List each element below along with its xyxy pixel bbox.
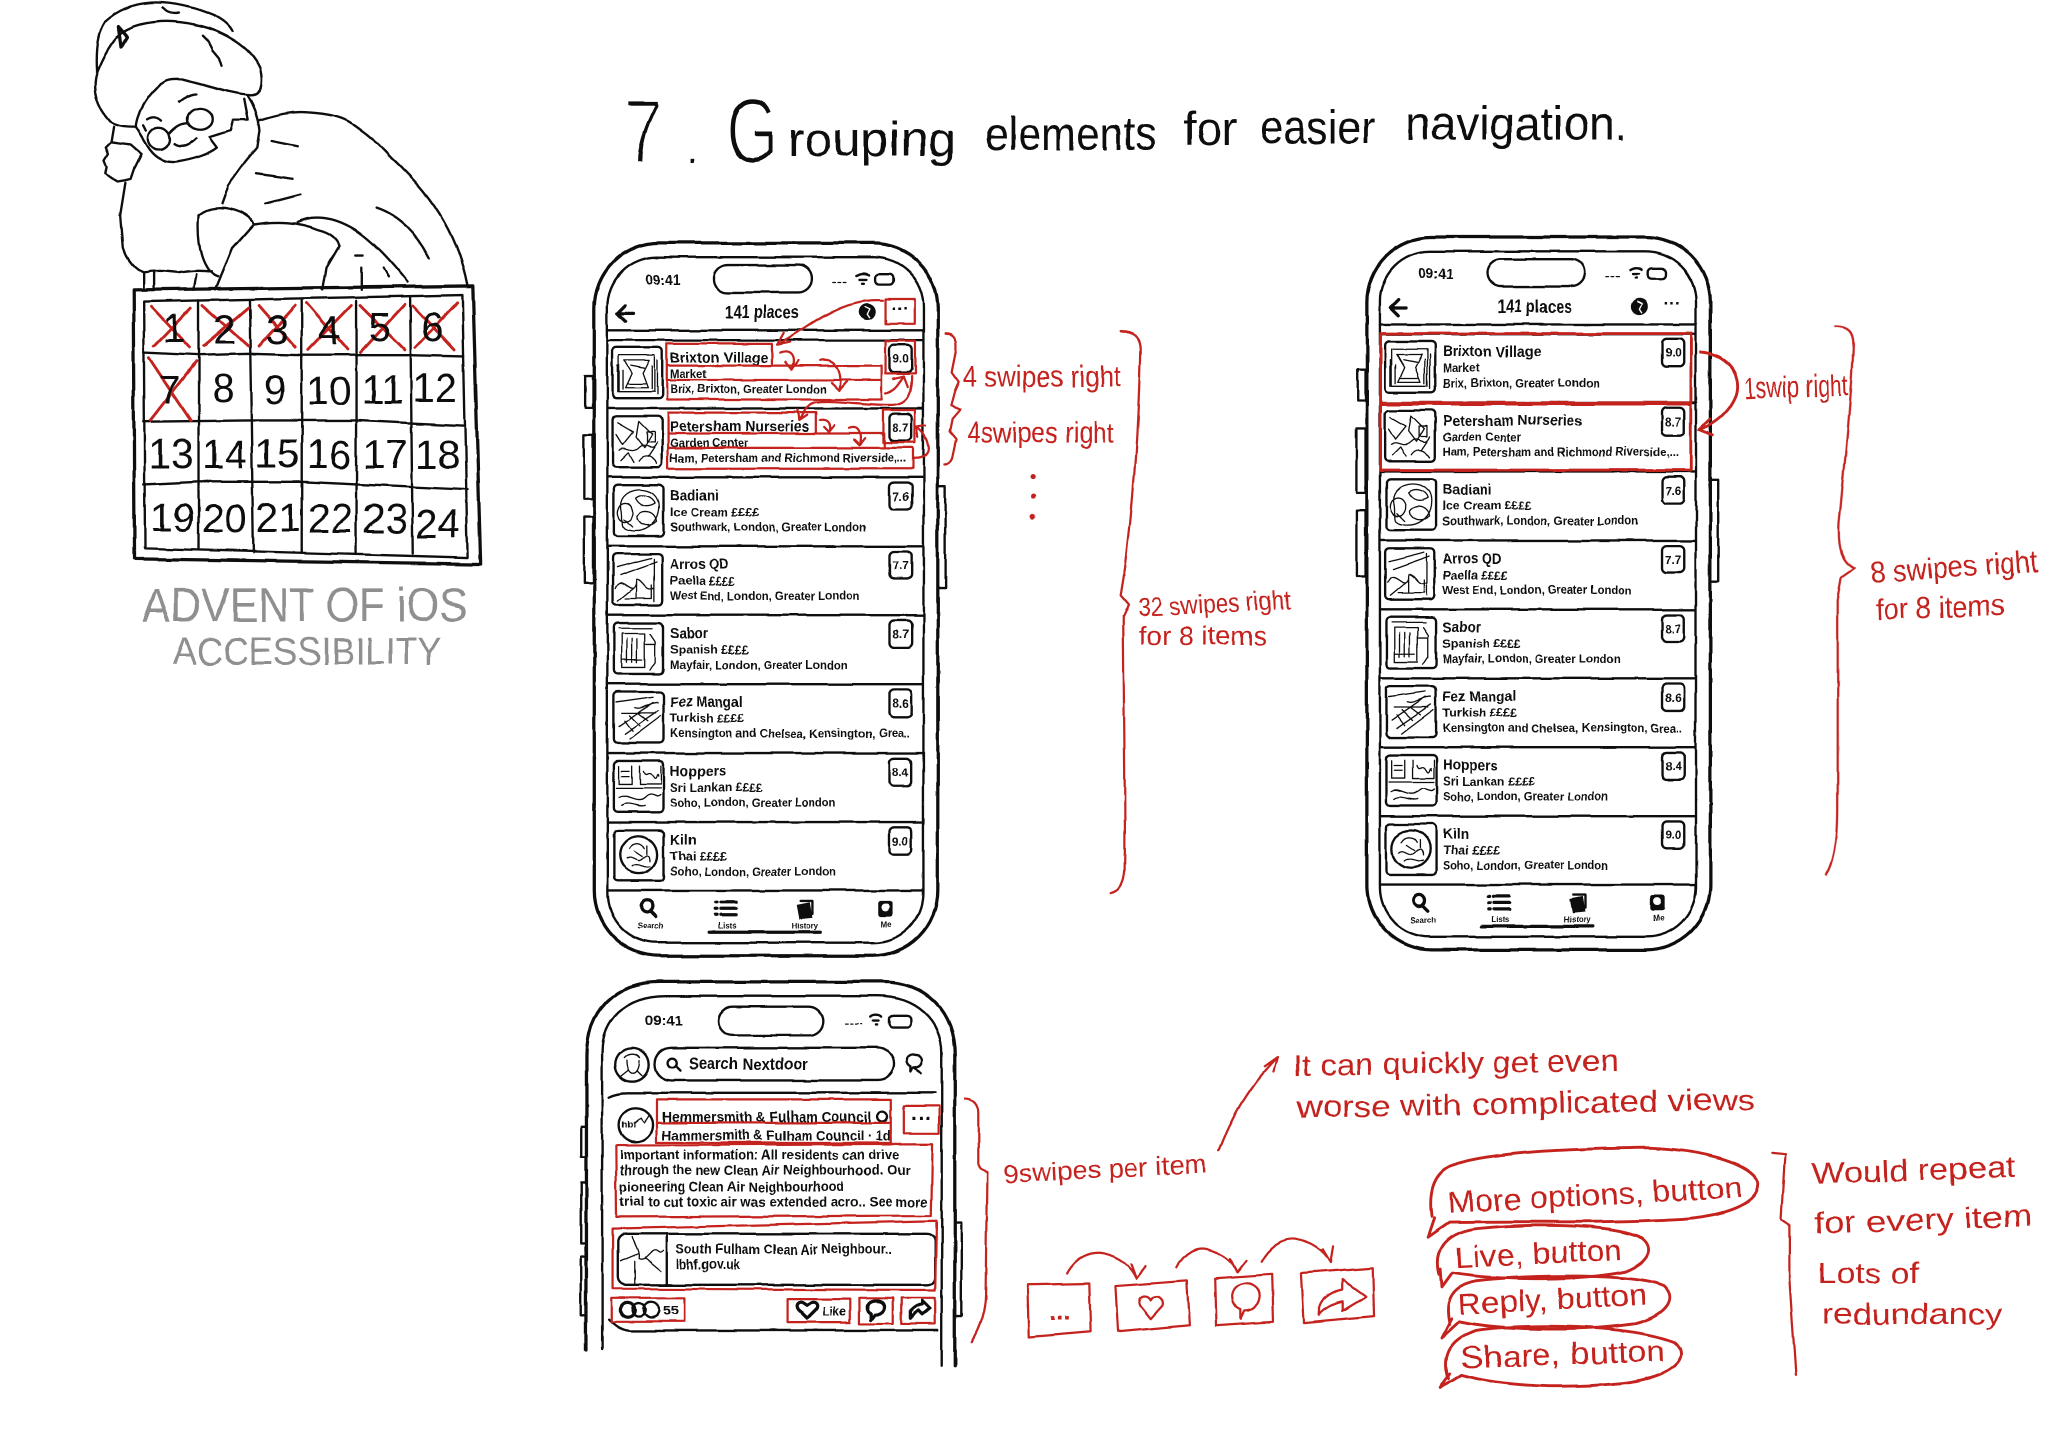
calendar numbers row 1: 2 xyxy=(213,306,236,352)
calendar numbers row 1: 6 xyxy=(421,304,444,350)
list row: Petersham Nurseries xyxy=(613,414,912,467)
list row: Fez Mangal: Kensington and Chelsea, Kensington, Grea.. xyxy=(1443,721,1683,735)
calendar numbers row 4: 22 xyxy=(308,496,353,542)
calendar numbers row 2: 7 xyxy=(159,366,181,412)
post body: trial to cut toxic air was extended acro.. See more xyxy=(620,1194,928,1209)
link preview: lbhf.gov.uk xyxy=(676,1257,740,1272)
big brace: phone 2 xyxy=(1826,326,1855,875)
list row: Badiani: Badiani xyxy=(1443,481,1491,498)
brace: phone 3 xyxy=(965,1098,987,1342)
box: more options: ... xyxy=(1048,1296,1070,1326)
tab bar xyxy=(1410,894,1665,926)
main heading: 7 xyxy=(624,81,662,183)
list row: Fez Mangal: 8.6 xyxy=(892,698,909,711)
council logo: hbf xyxy=(622,1120,637,1130)
calendar numbers row 2 xyxy=(159,365,457,414)
phone frame xyxy=(581,982,961,1366)
list row: Petersham Nurseries: Petersham Nurseries xyxy=(1443,412,1582,429)
list row: Petersham Nurseries: 8.7 xyxy=(892,422,909,435)
list row: Badiani: Badiani xyxy=(670,487,718,504)
list row: Badiani: Southwark, London, Greater London xyxy=(670,520,866,534)
post author: Hemmersmith & Fulham Council xyxy=(662,1109,871,1126)
list row: Kiln: Soho, London, Greater London xyxy=(1443,859,1608,873)
reactions xyxy=(620,1302,679,1318)
calendar numbers row 1: 5 xyxy=(369,304,391,350)
nav bar: ··· xyxy=(891,300,908,319)
list row: Hoppers: Sri Lankan ££££ xyxy=(670,781,763,795)
list row: Arros QD: 7.7 xyxy=(1665,554,1682,567)
ellipsis dots xyxy=(1031,474,1036,520)
list row: Fez Mangal xyxy=(614,689,912,743)
calendar numbers row 3 xyxy=(149,430,460,478)
status bar xyxy=(1418,259,1666,287)
list row: Hoppers xyxy=(614,758,912,812)
box: like xyxy=(1115,1281,1190,1332)
list row: Petersham Nurseries: 8.7 xyxy=(1665,416,1682,429)
box: comment xyxy=(1215,1274,1273,1325)
speech bubble: live: Live, button xyxy=(1454,1234,1623,1275)
annotation: for 8 items: for 8 items xyxy=(1875,589,2005,627)
calendar numbers row 4: 19 xyxy=(150,494,195,540)
list row: Hoppers: Soho, London, Greater London xyxy=(1443,790,1608,804)
calendar numbers row 3: 13 xyxy=(149,430,194,476)
main heading: for xyxy=(1183,102,1237,155)
list row: Sabor: Mayfair, London, Greater London xyxy=(1443,652,1620,666)
brace: bubbles xyxy=(1772,1153,1796,1375)
list row: Badiani: 7.6 xyxy=(892,491,909,504)
list row: Kiln: Kiln xyxy=(1443,826,1469,843)
list row: Badiani: Ice Cream ££££ xyxy=(670,505,759,519)
list row: Petersham Nurseries: Petersham Nurseries xyxy=(670,418,810,435)
post body: pioneering Clean Air Neighbourhood xyxy=(620,1179,844,1194)
tab bar: History xyxy=(791,921,819,930)
nav bar xyxy=(607,300,923,330)
tab bar: Lists xyxy=(718,921,737,930)
tab bar: History xyxy=(1564,915,1591,924)
red group boxes on phone 2 xyxy=(1381,334,1691,470)
tab bar: Search xyxy=(1410,915,1436,924)
calendar numbers row 2: 8 xyxy=(212,365,235,411)
list row: Sabor: Spanish ££££ xyxy=(1443,637,1521,651)
annotation: 9 swipes per item: 9swipes per item xyxy=(1002,1148,1208,1189)
list row: Fez Mangal: Fez Mangal xyxy=(1443,688,1516,705)
advent calendar xyxy=(133,286,481,564)
calendar numbers row 4: 20 xyxy=(202,496,247,542)
list row: Fez Mangal: Kensington and Chelsea, Kensington, Grea.. xyxy=(670,727,910,741)
note: gets worse xyxy=(1293,1044,1756,1125)
note: redundancy: Lots of xyxy=(1818,1257,1919,1290)
reactions: 55 xyxy=(663,1303,679,1318)
nav bar xyxy=(1380,294,1696,324)
status bar: 09:41 xyxy=(1418,267,1453,283)
annotation: 4 swipes right second item: 4swipes right xyxy=(967,417,1115,450)
list row: Arros QD: Arros QD xyxy=(1443,550,1502,567)
note: redundancy: redundancy xyxy=(1822,1298,2002,1331)
calendar numbers row 4: 23 xyxy=(363,496,408,542)
post body xyxy=(620,1147,928,1209)
list row: Sabor: 8.7 xyxy=(892,629,909,642)
calendar numbers row 3: 17 xyxy=(363,432,408,478)
main heading: . xyxy=(687,129,698,172)
speech bubble: share: Share, button xyxy=(1460,1335,1666,1375)
list row: Hoppers: 8.4 xyxy=(1665,761,1682,774)
list row: Fez Mangal: Fez Mangal xyxy=(670,694,743,711)
list row: Badiani: 7.6 xyxy=(1665,485,1682,498)
illustration: Santa with sack xyxy=(95,2,468,290)
calendar numbers row 1: 4 xyxy=(318,308,340,354)
list row: Brixton Village: Brixton Village xyxy=(670,349,768,366)
calendar numbers row 2: 10 xyxy=(307,368,352,414)
speech bubble: more options xyxy=(1428,1148,1758,1238)
list row: Fez Mangal: Turkish ££££ xyxy=(1443,706,1517,720)
note: gets worse: It can quickly get even xyxy=(1293,1044,1619,1083)
search row: Search Nextdoor xyxy=(689,1055,808,1073)
list row: Sabor: Mayfair, London, Greater London xyxy=(670,658,848,672)
brace: 4 swipes xyxy=(944,334,960,464)
nav bar: 141 places xyxy=(1497,296,1572,317)
post card outline xyxy=(609,1093,938,1330)
list row: Kiln: Thai ££££ xyxy=(670,850,728,864)
main heading: rouping xyxy=(788,112,956,165)
main heading: G xyxy=(726,78,778,183)
list row: Sabor xyxy=(614,620,912,674)
list row: Fez Mangal: Turkish ££££ xyxy=(670,712,745,726)
red focus boxes on phone 1 xyxy=(667,299,915,469)
list row: Brixton Village: Brix, Brixton, Greater London xyxy=(1443,376,1599,390)
list row: Arros QD: 7.7 xyxy=(892,560,909,573)
annotation: 4 swipes right: 4 swipes right xyxy=(963,360,1121,393)
list row: Petersham Nurseries xyxy=(1385,408,1684,461)
note: would repeat xyxy=(1811,1151,2033,1241)
calendar numbers row 3: 16 xyxy=(307,432,352,478)
calendar numbers row 1: 1 xyxy=(162,305,185,351)
series title xyxy=(142,579,468,674)
list row: Petersham Nurseries: Garden Center xyxy=(670,436,749,450)
list row: Arros QD: Paella ££££ xyxy=(670,574,735,588)
list row: Arros QD xyxy=(1385,546,1684,599)
speech bubble: live xyxy=(1438,1225,1649,1287)
list row: Fez Mangal xyxy=(1386,684,1684,737)
list row: Brixton Village: Market xyxy=(670,367,707,381)
like button: Like xyxy=(823,1304,846,1319)
list row: Kiln: Kiln xyxy=(670,832,696,849)
box: share xyxy=(1301,1268,1374,1323)
main heading xyxy=(624,78,1627,183)
note: would repeat: Would repeat xyxy=(1811,1151,2017,1191)
share button xyxy=(910,1300,930,1319)
list row: Sabor xyxy=(1386,615,1684,668)
list row: Hoppers xyxy=(1386,752,1684,806)
note: gets worse: worse with complicated views xyxy=(1296,1084,1756,1125)
list row: Brixton Village: 9.0 xyxy=(892,353,909,366)
list row: Brixton Village xyxy=(613,345,912,398)
list row: Arros QD: Paella ££££ xyxy=(1443,568,1508,582)
phone 3: Nextdoor post xyxy=(581,982,961,1366)
list row: Kiln: 9.0 xyxy=(1665,830,1682,843)
tab bar: Me xyxy=(880,920,892,929)
list row: Kiln: 9.0 xyxy=(892,836,909,849)
note: would repeat: for every item xyxy=(1814,1200,2033,1241)
like button xyxy=(797,1302,846,1319)
note: redundancy xyxy=(1818,1257,2002,1331)
list row: Sabor: Sabor xyxy=(1443,619,1481,636)
main heading: elements xyxy=(985,107,1156,160)
list row: Kiln xyxy=(1386,821,1684,875)
list row: Badiani xyxy=(1386,477,1684,530)
calendar numbers row 3: 18 xyxy=(415,432,460,478)
calendar numbers row 3: 14 xyxy=(202,432,247,478)
list row: Kiln: Soho, London, Greater London xyxy=(670,865,836,879)
list row: Badiani: Southwark, London, Greater London xyxy=(1443,514,1639,528)
list row: Sabor: 8.7 xyxy=(1665,623,1682,636)
status bar: 09:41 xyxy=(645,273,680,289)
list row: Arros QD: Arros QD xyxy=(670,556,729,573)
link preview: South Fulham Clean Air Neighbour.. xyxy=(676,1242,891,1257)
main heading: navigation. xyxy=(1405,97,1627,150)
list row: Arros QD xyxy=(613,552,912,605)
red swipe arrows on phone 1 xyxy=(777,300,929,458)
list row: Arros QD: West End, London, Greater London xyxy=(670,589,859,603)
list row: Brixton Village: Brixton Village xyxy=(1443,343,1541,360)
list row: Arros QD: West End, London, Greater London xyxy=(1443,583,1632,597)
list row: Badiani: Ice Cream ££££ xyxy=(1443,499,1532,513)
council logo xyxy=(619,1108,653,1142)
swipe order boxes xyxy=(1028,1239,1374,1337)
list row: Hoppers: Sri Lankan ££££ xyxy=(1443,775,1535,789)
post author xyxy=(662,1109,891,1143)
phone frame xyxy=(1356,237,1718,950)
calendar numbers row 4: 21 xyxy=(256,494,301,540)
calendar numbers row 1 xyxy=(162,304,444,354)
annotation: 32 swipes right: 32 swipes right xyxy=(1137,584,1292,622)
link preview xyxy=(618,1234,935,1285)
calendar numbers row 2: 11 xyxy=(362,366,404,412)
status bar: 09:41 xyxy=(645,1013,682,1030)
list row: Brixton Village: Brix, Brixton, Greater London xyxy=(670,382,827,396)
speech bubble: reply xyxy=(1442,1276,1670,1337)
list row: Petersham Nurseries: Ham, Petersham and Richmond Riverside,... xyxy=(670,451,906,465)
list row: Petersham Nurseries: Garden Center xyxy=(1443,430,1521,444)
tab bar: Search xyxy=(637,921,664,930)
annotation: for 8 items: for 8 items xyxy=(1139,621,1267,651)
search row xyxy=(615,1048,922,1082)
calendar numbers row 2: 12 xyxy=(412,365,457,411)
series title: ADVENT OF iOS xyxy=(142,579,468,632)
tab bar: Lists xyxy=(1491,915,1510,924)
phone 1: per-element list xyxy=(584,243,946,956)
post author: Hammersmith & Fulham Council · 1d xyxy=(662,1128,891,1143)
phone frame xyxy=(584,243,946,956)
red focus boxes on phone 3 xyxy=(611,1099,939,1324)
phone 2: grouped list xyxy=(1356,237,1718,950)
list row: Sabor: Spanish ££££ xyxy=(670,643,749,657)
calendar numbers row 4 xyxy=(150,494,460,547)
calendar numbers row 3: 15 xyxy=(254,430,299,476)
big brace: phone 1 xyxy=(1110,332,1140,893)
series title: ACCESSIBILITY xyxy=(172,631,441,674)
list row: Brixton Village xyxy=(1385,339,1684,392)
list row: Petersham Nurseries: Ham, Petersham and Richmond Riverside,... xyxy=(1443,445,1679,459)
calendar numbers row 1: 3 xyxy=(266,306,288,352)
tab bar: Me xyxy=(1653,914,1664,923)
list row: Kiln xyxy=(614,827,912,881)
post dots: ··· xyxy=(911,1107,932,1130)
speech bubble: more options: More options, button xyxy=(1447,1171,1743,1220)
list row: Hoppers: Soho, London, Greater London xyxy=(670,796,836,810)
speech bubble: share xyxy=(1441,1326,1681,1388)
list row: Hoppers: Hoppers xyxy=(1443,757,1499,774)
list row: Kiln: Thai ££££ xyxy=(1443,844,1500,858)
crossed days xyxy=(149,303,457,420)
tab bar xyxy=(637,900,892,932)
calendar numbers row 2: 9 xyxy=(264,366,287,412)
swipe arrows xyxy=(1067,1239,1334,1278)
comment button xyxy=(867,1300,884,1320)
list row: Fez Mangal: 8.6 xyxy=(1665,692,1682,705)
list row: Brixton Village: Market xyxy=(1443,361,1479,375)
speech bubble: reply: Reply, button xyxy=(1457,1279,1648,1321)
list row: Badiani xyxy=(614,483,912,536)
calendar numbers row 4: 24 xyxy=(415,501,460,547)
annotation: 1 swipe right: 1swip right xyxy=(1743,369,1849,406)
list row: Hoppers: 8.4 xyxy=(892,767,909,780)
main heading: easier xyxy=(1259,101,1375,154)
list row: Brixton Village: 9.0 xyxy=(1665,347,1682,360)
box: more options xyxy=(1028,1283,1091,1337)
post body: through the new Clean Air Neighbourhood. Our xyxy=(620,1163,910,1178)
list row: Sabor: Sabor xyxy=(670,625,708,642)
nav bar: ··· xyxy=(1664,294,1681,313)
red swipe arrow on phone 2 xyxy=(1699,353,1737,435)
nav bar: 141 places xyxy=(725,302,799,323)
post body: Important information: All residents can drive xyxy=(620,1147,900,1162)
status bar xyxy=(645,265,893,292)
list row: Hoppers: Hoppers xyxy=(670,763,726,780)
arrow to note xyxy=(1219,1058,1277,1150)
status bar xyxy=(645,1007,910,1035)
